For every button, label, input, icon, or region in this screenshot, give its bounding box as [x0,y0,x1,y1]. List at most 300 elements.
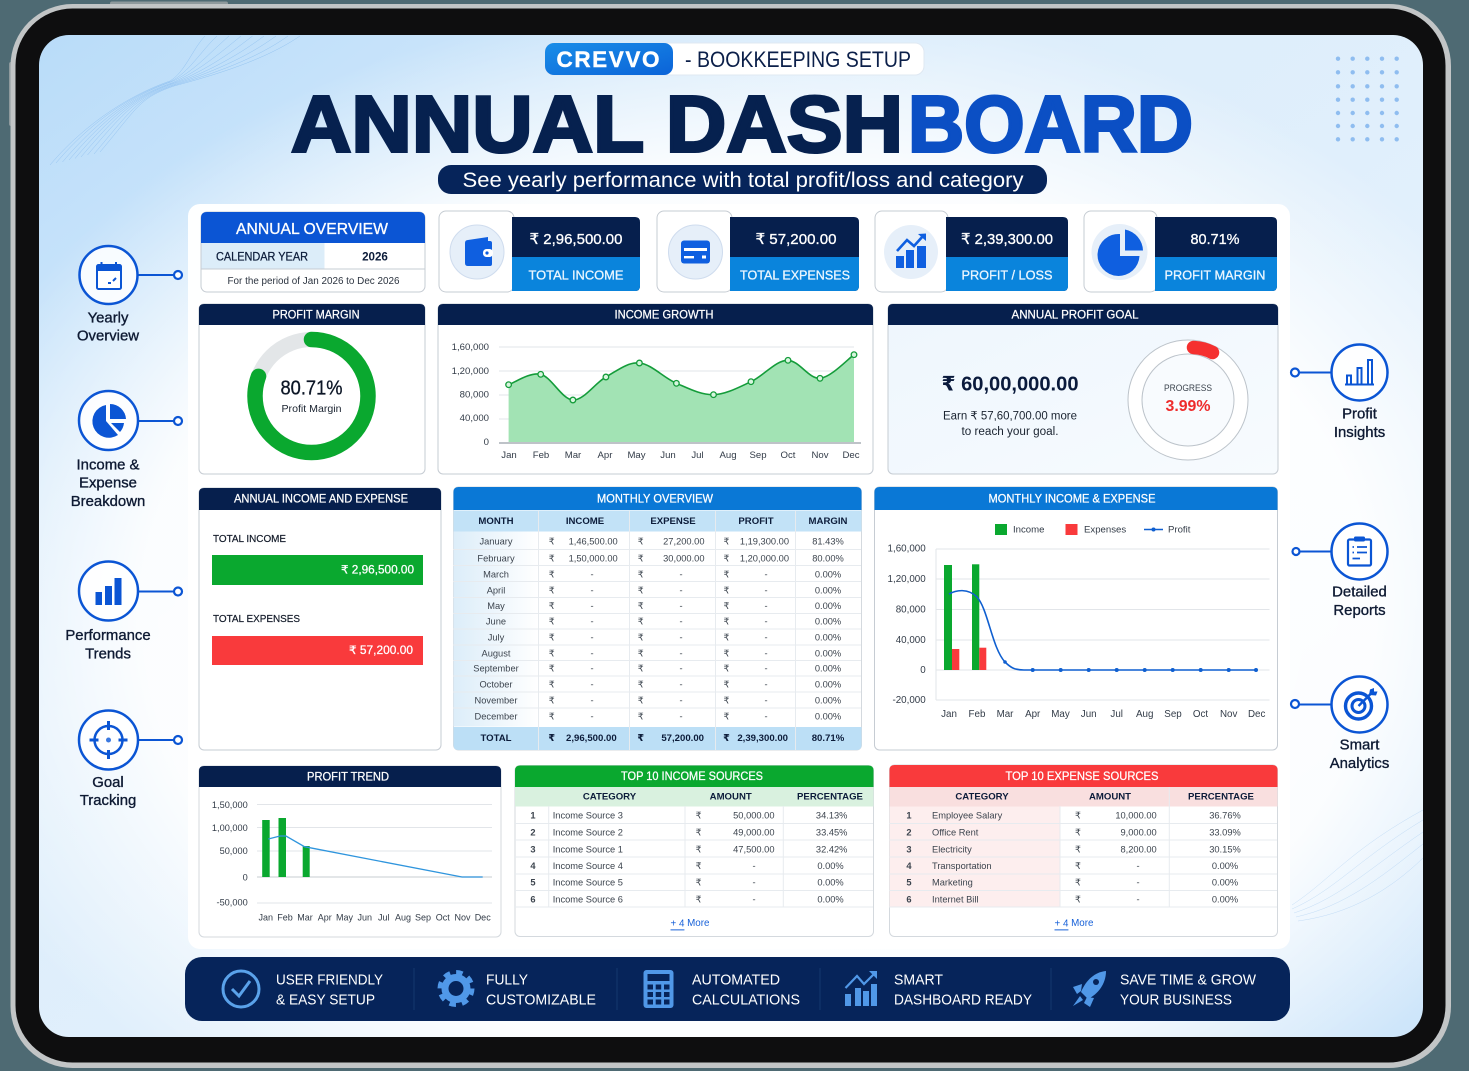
panel: annual profit goal: to reach your goal. [962,426,1058,438]
expense rows: 0.00% [1212,895,1238,905]
right feature: profit insights: Profit [1342,407,1378,423]
table row: April: - [764,585,768,595]
table row: May: May [487,601,505,611]
panel: top 10 expense sources: PERCENTAGE [1188,792,1255,803]
table row: May: - [764,601,768,611]
panel: top 10 expense sources [889,765,1278,936]
feature: user friendly: USER FRIENDLY [276,972,383,989]
left feature: goal tracking: Goal [92,775,124,791]
profit trend chart: Oct [436,913,450,923]
table row: total [480,733,845,744]
bar and line chart: 1,20,000 [888,574,926,585]
bar and line chart: Dec [1248,709,1266,720]
table row: January: 1,19,300.00 [740,536,789,546]
feature: customizable: CUSTOMIZABLE [486,991,596,1008]
icon: calendar [97,262,121,289]
left feature: income and expense breakdown [71,391,182,510]
table row: March: 0.00% [815,569,841,579]
table row: August: - [764,648,768,658]
table row: November [475,696,841,706]
expense rows: ₹ [1075,861,1081,871]
table row: June: ₹ [549,617,555,627]
table row: May: - [590,601,594,611]
table row: July: ₹ [638,633,644,643]
expense rows: ₹ [1075,895,1081,905]
expense rows: 1 [906,811,912,821]
expense rows: Transportation [932,861,992,871]
icon: check circle [223,971,259,1007]
panel: income growth: INCOME GROWTH [614,308,714,322]
area chart: Aug [719,450,737,461]
bar and line chart: Jun [1081,709,1097,720]
more link: + 4 More [671,918,710,929]
income rows: ₹ [696,861,702,871]
icon: target with arrow [1346,688,1378,719]
panel: monthly overview table: PROFIT [738,516,774,527]
table row: October: 0.00% [815,680,841,690]
table row: January: 81.43% [812,536,844,546]
expense rows: 5 [906,878,912,888]
table row: September: - [679,664,683,674]
feature: customizable [486,972,596,1008]
table row: April: 0.00% [815,585,841,595]
panel: top 10 income sources [515,766,874,936]
panel: annual income and expense: TOTAL INCOME [213,534,286,545]
profit trend chart: May [336,913,353,923]
panel: monthly overview table: EXPENSE [650,516,696,527]
table row: January: 1,46,500.00 [569,536,618,546]
income rows: 34.13% [816,811,847,821]
feature: smart dashboard [894,972,1032,1008]
income rows: Income Source 5 [553,878,623,888]
panel: monthly overview table [453,487,862,750]
icon: rocket [1073,971,1106,1007]
panel: top 10 expense sources: AMOUNT [1089,792,1131,803]
income rows: 1 [530,811,536,821]
area chart: 1,20,000 [452,366,489,377]
icon: crosshair [90,721,128,759]
area chart: Dec [842,450,860,461]
income rows: - [752,861,756,871]
expense rows: - [1136,878,1140,888]
expense rows: 0.00% [1212,878,1238,888]
table row: March: - [764,569,768,579]
panel: top 10 expense sources: TOP 10 EXPENSE SOURCES [1006,769,1158,783]
panel: profit margin donut [199,304,425,474]
table row: August: 0.00% [815,648,841,658]
expense rows: ₹ [1075,878,1081,888]
bar and line chart: Oct [1193,709,1208,720]
table row: total: 2,39,300.00 [737,733,788,744]
left feature: goal tracking: Tracking [80,793,136,809]
income rows: ₹ [696,878,702,888]
bar and line chart: Aug [1136,709,1153,720]
income rows: Income Source 4 [553,861,623,871]
expense rows: 3 [906,844,912,854]
panel: monthly income and expense chart [874,487,1278,750]
table row: total: ₹ [637,733,644,744]
table row: March: - [679,569,683,579]
table row: August: ₹ [724,648,730,658]
subtitle pill: See yearly performance with total profit/loss and category [462,168,1024,192]
decorative wave bottom-right [1292,810,1423,921]
left feature: yearly overview: Yearly [88,311,129,327]
table row: December: ₹ [724,712,730,722]
profit trend chart: Aug [395,913,411,923]
area chart: May [627,450,646,461]
table row: February [477,553,844,563]
area chart: Jul [691,450,704,461]
panel: annual overview: CALENDAR YEAR [216,251,308,264]
feature: automated calculations: AUTOMATED [692,972,780,989]
expense rows: 36.76% [1209,811,1241,821]
bar and line chart [888,544,1270,720]
KPI card: total expenses: ₹ 57,200.00 [756,231,836,248]
area chart [452,342,861,461]
table row: April: ₹ [724,585,730,595]
table row: November: ₹ [724,696,730,706]
panel: monthly overview table: MONTH [478,516,514,527]
profit trend chart: 1,00,000 [212,823,248,833]
panel: top 10 expense sources: CATEGORY [955,792,1009,803]
income rows: ₹ [696,895,702,905]
panel: annual profit goal: ₹ 60,00,000.00 [942,374,1078,396]
profit trend chart: 0 [243,872,248,882]
income rows: ₹ [696,811,702,821]
profit trend chart: Jun [357,913,372,923]
table row: April [487,585,841,595]
profit trend chart: 1,50,000 [212,800,248,810]
bar and line chart: Jul [1110,709,1123,720]
table row: October: - [590,680,594,690]
table row: October: ₹ [724,680,730,690]
income rows: 32.42% [816,844,847,854]
expense bar: ₹ 57,200.00 [349,645,413,657]
table row: September [473,664,841,674]
KPI card: profit margin [1084,211,1277,292]
panel: profit trend [199,766,501,937]
area chart: 80,000 [460,390,489,401]
table row: December: - [679,712,683,722]
table row: September: September [473,664,519,674]
table row: total: ₹ [723,733,730,744]
feature: user friendly [276,972,383,1008]
table row: May: ₹ [638,601,644,611]
left feature: income and expense breakdown: Income & [77,458,140,474]
icon: credit card [681,240,710,264]
panel: annual income and expense: TOTAL EXPENSES [213,614,300,625]
expense bar [212,636,423,665]
expense rows [906,811,1241,905]
income rows: 47,500.00 [733,844,774,854]
bar and line chart: 80,000 [896,604,926,615]
table row: March [483,569,841,579]
table row: October: - [764,680,768,690]
donut chart: 80.71% [280,378,343,400]
table row: total: TOTAL [480,733,512,744]
panel: profit margin donut: PROFIT MARGIN [272,308,360,322]
income bar: ₹ 2,96,500.00 [341,565,414,577]
table row: December: - [764,712,768,722]
expense rows: 6 [906,895,912,905]
donut chart: Profit Margin [282,404,342,415]
table row: August [482,648,841,658]
feature: customizable: FULLY [486,972,528,989]
chart legend: Expenses [1084,525,1126,536]
table row: January: ₹ [638,536,644,546]
table row: total: 57,200.00 [661,733,704,744]
table row: March: ₹ [724,569,730,579]
icon: pie chart [1098,230,1143,276]
expense rows: 9,000.00 [1120,828,1157,838]
area chart: Apr [598,450,613,461]
KPI card: total income [439,211,640,292]
right feature: profit insights: Insights [1334,425,1385,441]
KPI card: profit margin: PROFIT MARGIN [1164,268,1266,283]
table row: July: - [679,633,683,643]
expense rows: - [1136,861,1140,871]
table row: September: ₹ [638,664,644,674]
right feature: detailed reports [1292,524,1388,619]
bar and line chart: 40,000 [896,635,926,646]
table row: May [487,601,841,611]
table row: May: 0.00% [815,601,841,611]
table row: November: November [475,696,517,706]
table row: February: February [477,553,515,563]
expense rows: ₹ [1075,811,1081,821]
table row: September: 0.00% [815,664,841,674]
expense rows: ₹ [1075,844,1081,854]
progress ring: 3.99% [1166,398,1210,415]
profit trend chart: -50,000 [217,898,248,908]
KPI card: total expenses: TOTAL EXPENSES [740,268,850,283]
more link: + 4 More [1055,918,1094,929]
left feature: performance trends: Trends [85,647,131,663]
table row: October: ₹ [549,680,555,690]
table row: December: - [590,712,594,722]
income rows: - [752,878,756,888]
table row: July: 0.00% [815,633,841,643]
profit trend chart: Jul [378,913,389,923]
expense rows: 10,000.00 [1115,811,1157,821]
income rows: 6 [530,895,536,905]
panel: monthly income and expense chart: MONTHLY INCOME & EXPENSE [988,492,1156,506]
table row: November: - [679,696,683,706]
table row: April: - [590,585,594,595]
feature: automated calculations: CALCULATIONS [692,991,800,1008]
profit trend chart: Apr [318,913,332,923]
table row: September: - [764,664,768,674]
feature: automated calculations [692,972,800,1008]
panel: monthly overview table: MONTHLY OVERVIEW [597,492,714,506]
chart legend: Income [1013,525,1044,536]
income rows: Income Source 6 [553,895,623,905]
table row: October: October [479,680,513,690]
main title [291,80,1193,168]
table row: April: April [487,585,505,595]
table row: February: ₹ [724,553,730,563]
chart legend [995,524,1191,536]
bar and line chart: 1,60,000 [888,543,926,554]
donut chart [255,340,368,452]
profit trend chart: Nov [454,913,471,923]
table row: July: - [764,633,768,643]
feature: save time: YOUR BUSINESS [1120,991,1232,1008]
table row: December: 0.00% [815,712,841,722]
bar and line chart: 0 [920,665,926,676]
table row: June: 0.00% [815,617,841,627]
profit trend chart: Dec [475,913,491,923]
area chart: Feb [533,450,549,461]
right feature: smart analytics [1291,676,1389,772]
profit trend chart [212,800,492,923]
main title: ANNUAL DASH [291,80,903,168]
expense rows: - [1136,895,1140,905]
table row: August: ₹ [549,648,555,658]
income rows: 0.00% [817,878,844,888]
income rows: 3 [530,844,536,854]
panel: annual overview: 2026 [362,251,388,264]
table row: September: ₹ [549,664,555,674]
KPI card: profit / loss [875,211,1068,292]
feature: user friendly: & EASY SETUP [276,991,375,1008]
table row: November: ₹ [549,696,555,706]
table row: September: ₹ [724,664,730,674]
income rows: - [752,895,756,905]
panel: annual profit goal: Earn ₹ 57,60,700.00 more [943,411,1077,423]
right feature: profit insights [1291,344,1388,441]
table row: May: - [679,601,683,611]
left feature: yearly overview: Overview [77,329,139,345]
table row: July: ₹ [549,633,555,643]
icon: smart chart [845,971,877,1006]
table row: February: 1,50,000.00 [569,553,618,563]
table row: February: 80.00% [812,553,844,563]
table row: February: 30,000.00 [663,553,704,563]
left feature: yearly overview [77,246,182,345]
table row: June: June [486,617,506,627]
table row: October: ₹ [638,680,644,690]
table row: March: ₹ [638,569,644,579]
table row: September: - [590,664,594,674]
table row: January [479,536,844,546]
panel: annual overview: For the period of Jan 2026 to Dec 2026 [228,276,400,287]
KPI card: profit / loss: ₹ 2,39,300.00 [961,231,1053,248]
area chart: 40,000 [460,413,489,424]
icon: calculator [644,970,674,1008]
income rows: 33.45% [816,828,847,838]
bar and line chart: Apr [1025,709,1041,720]
table row: June: ₹ [638,617,644,627]
icon: bars [96,578,122,605]
left feature: income and expense breakdown: Breakdown [71,494,145,510]
panel: annual profit goal [888,304,1278,474]
decorative wave top-left [50,36,300,165]
table row: November: ₹ [638,696,644,706]
left feature: performance trends: Performance [65,628,151,644]
table row: May: ₹ [724,601,730,611]
table row: November: 0.00% [815,696,841,706]
expense rows: Employee Salary [932,811,1003,821]
panel: annual income and expense: ANNUAL INCOME AND EXPENSE [234,492,408,506]
dot grid decoration [1336,56,1399,142]
footer banner [185,957,1290,1021]
panel: top 10 income sources: TOP 10 INCOME SOURCES [621,769,763,783]
table row: January: ₹ [549,536,555,546]
income rows: ₹ [696,828,702,838]
KPI card: total expenses [657,211,859,292]
expense rows: 4 [906,861,912,871]
KPI card: total income: ₹ 2,96,500.00 [530,231,622,248]
panel: income growth [438,304,873,474]
panel: top 10 income sources: AMOUNT [710,792,752,803]
area chart: 0 [484,437,489,448]
profit trend chart: Feb [277,913,293,923]
icon: clipboard [1348,536,1371,566]
bar and line chart: May [1051,709,1070,720]
table row: April: ₹ [549,585,555,595]
icon: rising chart [896,234,926,268]
progress ring [1128,340,1248,460]
feature: smart dashboard: DASHBOARD READY [894,991,1032,1008]
bar and line chart: Nov [1220,709,1238,720]
income rows: 4 [530,861,536,871]
bar and line chart: Jan [941,709,957,720]
expense rows: Marketing [932,878,973,888]
income rows: 50,000.00 [733,811,774,821]
table row: February: ₹ [638,553,644,563]
panel: annual overview: ANNUAL OVERVIEW [236,221,389,238]
right feature: detailed reports: Reports [1333,603,1386,619]
area chart: Sep [749,450,767,461]
feature: save time [1120,972,1257,1008]
KPI card: profit / loss: PROFIT / LOSS [962,268,1053,283]
income rows: 49,000.00 [733,828,774,838]
panel: annual income and expense [199,488,441,750]
area chart: Mar [565,450,582,461]
income rows: Income Source 2 [553,828,623,838]
table row: August: ₹ [638,648,644,658]
table row: December: ₹ [549,712,555,722]
expense rows: Internet Bill [932,895,979,905]
income rows: Income Source 1 [553,844,623,854]
table row: total: 2,96,500.00 [566,733,617,744]
KPI card: profit margin: 80.71% [1190,231,1240,248]
table row: January: January [479,536,513,546]
expense rows: 8,200.00 [1120,844,1157,854]
bar and line chart: Sep [1164,709,1182,720]
table row: December: ₹ [638,712,644,722]
income rows [530,811,847,905]
panel: top 10 income sources: CATEGORY [583,792,637,803]
table row: July: ₹ [724,633,730,643]
panel: profit trend: PROFIT TREND [307,770,389,784]
table row: November: - [764,696,768,706]
icon: pie [92,404,126,438]
table row: November: - [590,696,594,706]
income rows: 0.00% [817,861,844,871]
expense rows: 33.09% [1209,828,1241,838]
profit trend chart: Jan [258,913,273,923]
table row: July: - [590,633,594,643]
table row: April: - [679,585,683,595]
main title: BOARD [908,80,1193,168]
icon: wallet [465,237,493,266]
bar and line chart: -20,000 [892,695,926,706]
table row: December: December [475,712,517,722]
income rows: 0.00% [817,895,844,905]
feature: smart dashboard: SMART [894,972,943,989]
